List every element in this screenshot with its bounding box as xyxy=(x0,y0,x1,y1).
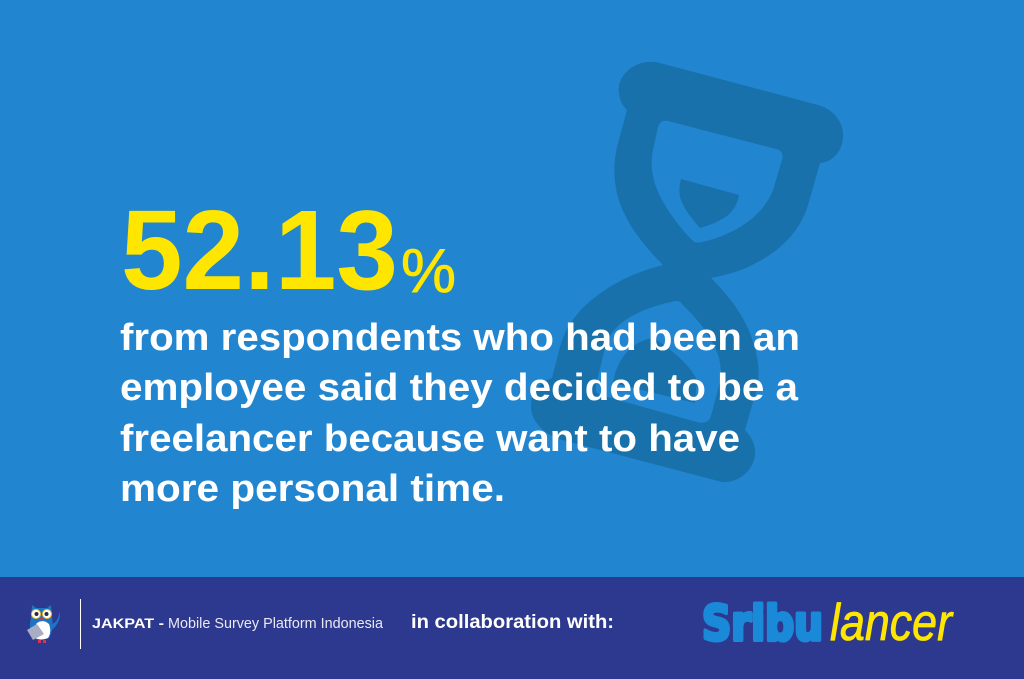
icon: upper sand xyxy=(680,179,739,228)
divider line xyxy=(80,599,81,649)
logo: Sribulancer: Sribu xyxy=(702,596,823,652)
percent sign: % xyxy=(401,237,456,306)
logo: Sribulancer: lancer xyxy=(830,594,954,652)
logo: Sribulancer xyxy=(702,594,954,652)
description text: freelancer because want to have xyxy=(120,418,740,460)
icon: hourglass watermark xyxy=(531,62,843,482)
description text: more personal time. xyxy=(120,468,505,510)
icon: lower sand xyxy=(613,338,697,403)
description text: from respondents who had been an xyxy=(120,317,800,359)
panel: footer band xyxy=(0,577,1024,679)
description text xyxy=(120,317,800,510)
collaboration label: in collaboration with: xyxy=(411,611,614,633)
big statistic: 52.13 xyxy=(121,187,398,313)
icon: JAKPAT owl mascot xyxy=(27,605,60,643)
description text: employee said they decided to be a xyxy=(120,367,799,409)
JAKPAT tagline: JAKPAT - xyxy=(92,616,164,631)
JAKPAT tagline: Mobile Survey Platform Indonesia xyxy=(168,616,384,632)
